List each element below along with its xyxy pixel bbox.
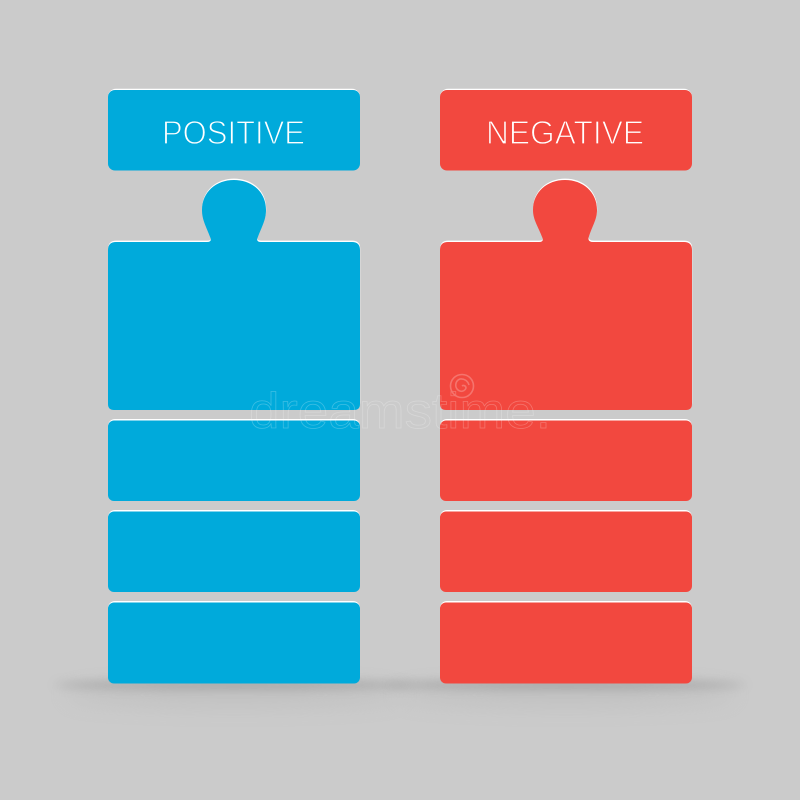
puzzle piece main block xyxy=(440,179,692,410)
negative bar 3 xyxy=(440,601,692,684)
watermark text: dreamstime. xyxy=(249,383,551,439)
negative bar 2 xyxy=(440,510,692,592)
positive bar 1 xyxy=(108,419,360,501)
heading: positive: POSITIVE xyxy=(162,114,305,151)
panel: positive column xyxy=(108,89,360,684)
negative bar 1 xyxy=(440,419,692,501)
ground shadow: positive column xyxy=(54,682,414,706)
watermark xyxy=(249,374,551,439)
heading: negative: NEGATIVE xyxy=(486,114,644,151)
ground shadow: negative column xyxy=(386,682,746,706)
positive bar 3 xyxy=(108,601,360,684)
puzzle piece main block xyxy=(108,179,360,410)
negative header box xyxy=(440,89,692,170)
watermark spiral icon xyxy=(450,374,474,398)
positive bar 2 xyxy=(108,510,360,592)
positive header box xyxy=(108,89,360,170)
panel: negative column xyxy=(440,89,692,684)
